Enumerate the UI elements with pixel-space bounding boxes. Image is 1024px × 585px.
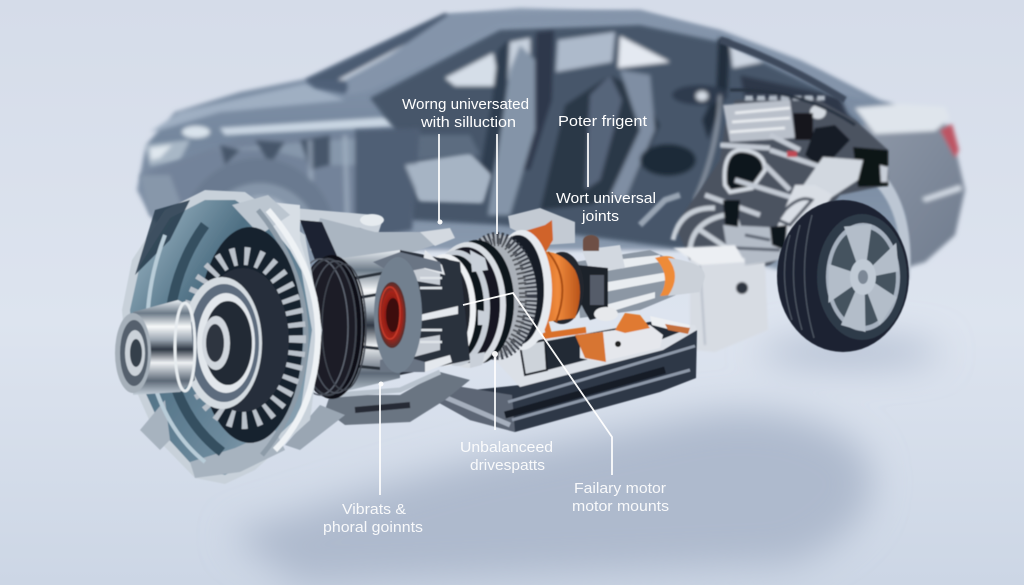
label: motor mounts: [572, 480, 669, 515]
rear quarter panel: [860, 125, 965, 268]
floor shadow: [230, 340, 940, 585]
tray: [495, 325, 697, 387]
transmission: [115, 190, 705, 484]
trunk lip highlight: [855, 104, 950, 134]
front section details: [140, 128, 490, 322]
small orange coupling: [655, 256, 680, 296]
orange pipe low: [543, 330, 586, 336]
label: top left: [402, 96, 529, 131]
black coil pack: [292, 255, 366, 399]
label: top left: Worng universated: [402, 96, 529, 113]
outer housing: [122, 190, 322, 484]
mounting platform: [425, 320, 697, 432]
label: vibrations: phoral goinnts: [323, 519, 423, 536]
windshield glass: [305, 10, 870, 100]
label: unbalanced driveshafts: Unbalanceed: [460, 439, 553, 456]
housing bright arc: [147, 235, 205, 462]
silver cylinder: [330, 250, 400, 395]
lower bracket: [285, 372, 470, 450]
car shell: [137, 8, 965, 270]
planet carrier: [373, 250, 470, 375]
collar rings: [414, 240, 514, 368]
engine bay: [640, 40, 888, 270]
spokes: [830, 226, 897, 330]
cabin interior: [370, 25, 860, 250]
label: unbalanced driveshafts: drivespatts: [470, 457, 545, 474]
tail light: [940, 124, 959, 158]
side windows: [445, 53, 500, 86]
dark rear arc: [695, 95, 720, 200]
label: vibrations: [323, 501, 423, 536]
orange drum: [540, 252, 584, 324]
silver big ring: [492, 230, 552, 350]
white gearbox block: [673, 245, 768, 352]
textured ring: [453, 234, 537, 358]
tyre: [777, 200, 909, 352]
white block with orange: [580, 325, 663, 362]
label: top right: Poter frigent: [558, 113, 648, 130]
rear wheel: [777, 200, 909, 352]
front wheel: [180, 158, 336, 322]
label: motor mounts: motor mounts: [572, 498, 669, 515]
headlight: [145, 140, 190, 166]
hood highlights: [220, 116, 413, 135]
label: unbalanced driveshafts: [460, 439, 553, 474]
rim: [826, 223, 900, 331]
output shaft: [115, 300, 195, 395]
seats: [405, 155, 490, 202]
rear motor cluster: [508, 208, 705, 375]
sprocket gear teeth: [189, 256, 297, 420]
inner housing bore: [197, 227, 303, 443]
label: vibrations: Vibrats &: [342, 501, 406, 518]
label: motor mounts: Failary motor: [574, 480, 666, 497]
rear wheel arch: [870, 170, 911, 280]
car body: [137, 8, 965, 322]
pillars: [480, 40, 508, 180]
silver motor block: [575, 250, 676, 318]
label: worn universal joints: [556, 190, 656, 225]
label: worn universal joints: Wort universal: [556, 190, 656, 207]
upper strut: [255, 205, 455, 260]
door handle highlight: [922, 185, 962, 202]
label: worn universal joints: joints: [581, 208, 619, 225]
leader lines: [378, 133, 612, 495]
housing bright rim: [268, 210, 318, 450]
bracket and orange pipe: [508, 208, 575, 245]
label: top left: with silluction: [420, 114, 516, 131]
bearing: [182, 277, 262, 409]
